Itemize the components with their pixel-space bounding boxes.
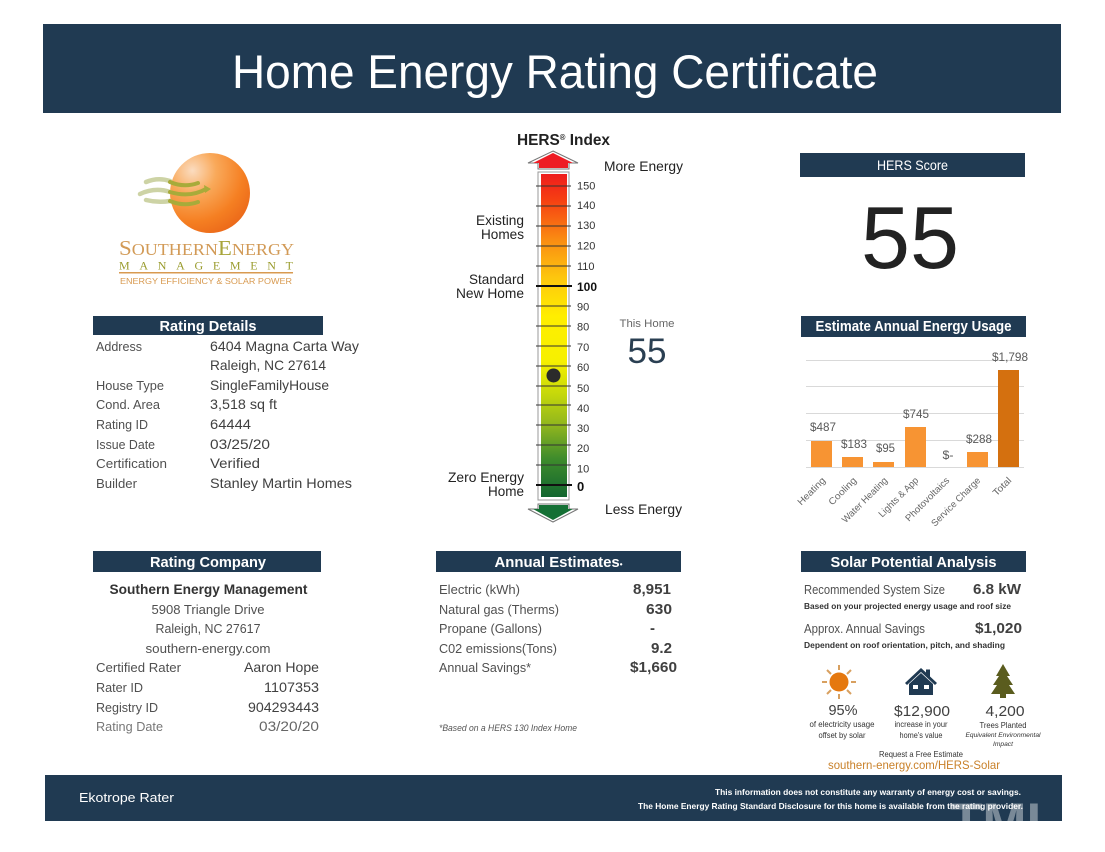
heading: annual estimates: Annual Estimates•	[494, 554, 623, 571]
stat: trees planted: Trees Planted	[980, 721, 1026, 730]
call to action	[828, 749, 1000, 772]
panel: rating details	[93, 316, 359, 491]
panel: rating company: Rating Date	[96, 719, 163, 734]
panel: rating company: southern-energy.com	[146, 641, 270, 656]
chart: HERS index scale: Homes	[481, 226, 524, 242]
panel: annual estimates: *Based on a HERS 130 Index Home	[439, 723, 577, 733]
bar chart	[796, 350, 1028, 529]
panel: estimate annual energy usage	[796, 316, 1028, 529]
chart: HERS index scale: 80	[577, 322, 589, 334]
heading: HERS score	[800, 153, 1025, 177]
chart: HERS index scale: Less Energy	[605, 501, 682, 517]
score value: 55	[861, 188, 959, 287]
panel: rating details: 6404 Magna Carta Way	[210, 338, 359, 354]
heading: rating company: Rating Company	[150, 554, 267, 571]
panel: annual estimates: 630	[646, 601, 672, 618]
panel: solar potential analysis	[801, 551, 1041, 772]
call to action: Request a Free Estimate	[879, 749, 963, 759]
panel: annual estimates: 8,951	[633, 581, 671, 598]
icon: down arrow	[528, 504, 578, 522]
stat: home value: home's value	[900, 731, 943, 740]
chart: HERS index scale: Existing	[476, 212, 524, 228]
marker: this home at 55	[546, 368, 560, 382]
panel: rating company: 904293443	[248, 699, 319, 715]
panel: rating details: House Type	[96, 378, 164, 393]
chart: HERS index scale: 20	[577, 443, 589, 455]
panel: annual estimates: C02 emissions(Tons)	[439, 641, 557, 656]
panel: rating company: 03/20/20	[259, 718, 319, 734]
chart: HERS index scale: ®	[560, 133, 566, 142]
chart: HERS index scale: 150	[577, 180, 595, 192]
logo: Southern Energy Management: MANAGEMENT	[119, 258, 294, 272]
icon: tree	[991, 664, 1015, 698]
panel: rating details: Raleigh, NC 27614	[210, 357, 326, 373]
logo: Southern Energy Management	[119, 153, 294, 286]
panel: rating details: 03/25/20	[210, 436, 270, 452]
chart: HERS index scale: More Energy	[604, 158, 683, 174]
chart: HERS index scale: 0	[577, 479, 584, 494]
stat: electricity offset: offset by solar	[818, 731, 866, 740]
panel: rating details: 64444	[210, 416, 251, 432]
footer bar: The Home Energy Rating Standard Disclosure for this home is available from the rating provider.	[638, 801, 1023, 811]
heading: solar potential: Solar Potential Analysis	[830, 554, 996, 571]
icon: up arrow	[528, 151, 578, 169]
chart: HERS index scale: Home	[488, 483, 524, 499]
heading: HERS score: HERS Score	[877, 158, 948, 173]
title banner	[43, 24, 1061, 113]
stat: trees planted: Equivalent Environmental	[966, 732, 1041, 739]
panel: rating details: Builder	[96, 476, 138, 491]
stat: trees planted	[966, 703, 1041, 748]
panel: solar potential analysis: 6.8 kW	[973, 581, 1022, 598]
chart: HERS index scale	[448, 132, 683, 522]
panel: annual estimates: Natural gas (Therms)	[439, 602, 559, 617]
panel: annual estimates: Electric (kWh)	[439, 582, 520, 597]
heading: rating details: Rating Details	[160, 318, 256, 335]
footer bar: Ekotrope Rater	[79, 790, 175, 805]
chart: HERS index scale: 130	[577, 220, 595, 232]
panel: rating company: Southern Energy Management	[110, 581, 308, 597]
panel: rating company: Certified Rater	[96, 660, 182, 675]
bar chart: Cooling	[827, 475, 859, 508]
chart: HERS index scale: Zero Energy	[448, 469, 524, 485]
bar chart: $183	[841, 437, 867, 451]
footer bar	[45, 775, 1062, 821]
chart: HERS index scale: 100	[577, 280, 597, 294]
panel: solar potential analysis: Based on your projected energy usage and roof size	[804, 601, 1011, 611]
callout: this home score: This Home	[620, 318, 674, 330]
chart: HERS index scale: 70	[577, 342, 589, 354]
heading: solar potential	[801, 551, 1026, 572]
stat: home value	[894, 703, 950, 740]
chart: HERS index scale: 40	[577, 403, 589, 415]
callout: this home score	[620, 318, 674, 371]
panel: rating details: SingleFamilyHouse	[210, 377, 329, 393]
bar chart: $288	[966, 432, 992, 446]
logo: Southern Energy Management: ENERGY EFFICIENCY & SOLAR POWER	[120, 276, 292, 286]
bar chart: $487	[810, 420, 836, 434]
chart: HERS index scale: 50	[577, 383, 589, 395]
panel: annual estimates: -	[650, 620, 655, 637]
bar chart: $745	[903, 407, 929, 421]
watermark: TMLS	[950, 793, 1094, 852]
panel: rating company	[93, 551, 321, 734]
bar chart: Heating	[796, 475, 828, 508]
footer bar: This information does not constitute any warranty of energy cost or savings.	[715, 787, 1021, 797]
bar chart: Photovoltaics	[903, 475, 952, 524]
panel: rating details: Address	[96, 339, 142, 354]
bar chart: Water Heating	[840, 475, 890, 526]
heading: energy usage: Estimate Annual Energy Usage	[816, 318, 1012, 335]
panel: rating details: 3,518 sq ft	[210, 396, 277, 412]
panel: rating details: Rating ID	[96, 417, 148, 432]
panel: solar potential analysis: Dependent on roof orientation, pitch, and shading	[804, 640, 1005, 650]
panel: rating details: Certification	[96, 456, 167, 471]
callout: this home score: 55	[628, 332, 666, 371]
panel: rating details: Issue Date	[96, 437, 155, 452]
logo: Southern Energy Management: SOUTHERN ENERGY	[119, 236, 294, 260]
panel: rating company: Rater ID	[96, 680, 143, 695]
panel: solar potential analysis: $1,020	[975, 620, 1022, 637]
icon: house	[905, 668, 937, 695]
stat: home value: increase in your	[894, 720, 948, 729]
chart: HERS index scale: 140	[577, 200, 595, 212]
stat: electricity offset: of electricity usage	[810, 720, 875, 729]
title banner: Home Energy Rating Certificate	[232, 45, 878, 98]
bar chart: $1,798	[992, 350, 1028, 364]
heading: rating company	[93, 551, 321, 572]
stat: trees planted: 4,200	[986, 703, 1024, 720]
panel: rating details: Stanley Martin Homes	[210, 475, 352, 491]
heading: annual estimates	[436, 551, 681, 572]
stat: home value: $12,900	[894, 703, 950, 720]
panel: annual estimates: Propane (Gallons)	[439, 621, 542, 636]
bar chart: Total	[991, 475, 1014, 499]
stat: electricity offset	[810, 702, 875, 740]
panel: rating company: 5908 Triangle Drive	[152, 602, 264, 617]
icon: sun	[822, 665, 856, 699]
panel: solar potential analysis: Recommended System Size	[804, 583, 945, 597]
panel: HERS score	[800, 153, 1025, 287]
chart: HERS index scale: New Home	[456, 285, 524, 301]
bar chart: Service Charge	[929, 475, 983, 529]
chart: HERS index scale: Index	[565, 132, 610, 149]
bar chart: $-	[942, 448, 954, 462]
chart: HERS index scale: 110	[577, 261, 595, 273]
chart: HERS index scale: 60	[577, 362, 589, 374]
chart: HERS index scale: 10	[577, 464, 589, 476]
panel: annual estimates: Annual Savings*	[439, 660, 531, 675]
stat: trees planted: Impact	[993, 741, 1014, 748]
panel: rating company: Registry ID	[96, 700, 158, 715]
panel: rating details: Cond. Area	[96, 397, 161, 412]
chart: HERS index scale: 90	[577, 302, 589, 314]
call to action: southern-energy.com/HERS-Solar	[828, 758, 1000, 772]
panel: solar potential analysis: Approx. Annual Savings	[804, 622, 925, 636]
panel: rating company: Aaron Hope	[244, 659, 319, 675]
chart: HERS index scale: HERS	[517, 132, 561, 149]
heading: rating details	[93, 316, 323, 335]
bar chart: $95	[876, 441, 895, 455]
panel: annual estimates: 9.2	[651, 640, 672, 657]
panel: rating company: 1107353	[264, 679, 319, 695]
bar chart: Lights & App	[877, 475, 921, 520]
stat: electricity offset: 95%	[828, 702, 858, 719]
panel: annual estimates	[436, 551, 681, 733]
panel: rating details: Verified	[210, 455, 260, 471]
chart: HERS index scale: 30	[577, 423, 589, 435]
chart: HERS index scale: 120	[577, 240, 595, 252]
panel: annual estimates: $1,660	[630, 659, 677, 676]
chart: HERS index scale: Standard	[469, 271, 524, 287]
panel: rating company: Raleigh, NC 27617	[156, 621, 260, 636]
